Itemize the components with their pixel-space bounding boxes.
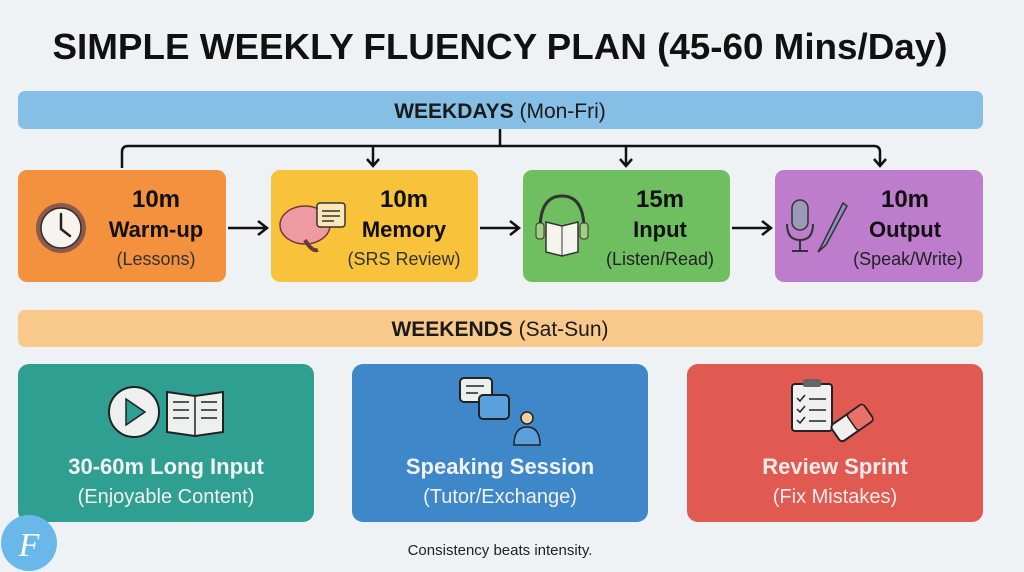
box: warm-up: [18, 170, 226, 282]
logo: [1, 515, 57, 571]
icon: brain: [280, 203, 345, 250]
box: memory: Memory: [362, 217, 447, 242]
panel: speaking session: Speaking Session: [406, 454, 594, 479]
box: input: [523, 170, 730, 282]
footer text: Consistency beats intensity.: [408, 542, 592, 559]
box: memory: 10m: [380, 186, 428, 213]
panel: speaking session: [352, 364, 648, 522]
icon: chat bubbles and person: [460, 378, 540, 445]
box: warm-up: Warm-up: [109, 217, 203, 242]
box: output: (Speak/Write): [853, 249, 963, 269]
panel: review sprint: [687, 364, 983, 522]
title: SIMPLE WEEKLY FLUENCY PLAN (45-60 Mins/Day): [52, 26, 947, 67]
icon: clock: [36, 203, 86, 253]
box: memory: (SRS Review): [347, 249, 461, 269]
box: warm-up: 10m: [132, 186, 180, 213]
box: output: Output: [869, 217, 942, 242]
icon: clipboard and eraser: [792, 379, 874, 443]
weekdays header bar: [18, 91, 983, 129]
panel: long input: [18, 364, 314, 522]
panel: review sprint: (Fix Mistakes): [773, 486, 897, 508]
logo: F: [18, 527, 41, 564]
arrow: [228, 221, 267, 235]
icon: mic and pen: [787, 200, 847, 252]
panel: speaking session: (Tutor/Exchange): [423, 486, 577, 508]
panel: long input: 30-60m Long Input: [68, 454, 264, 479]
connector arrows from weekdays bar: [122, 129, 886, 168]
arrow: [480, 221, 519, 235]
weekends header bar: [18, 310, 983, 347]
box: warm-up: (Lessons): [116, 249, 196, 269]
weekdays header bar: WEEKDAYS (Mon-Fri): [394, 100, 606, 123]
arrow: [732, 221, 771, 235]
panel: long input: (Enjoyable Content): [78, 486, 254, 508]
box: input: Input: [633, 217, 688, 242]
box: memory: [271, 170, 478, 282]
weekends header bar: WEEKENDS (Sat-Sun): [391, 318, 609, 341]
box: input: (Listen/Read): [606, 249, 714, 269]
box: input: 15m: [636, 186, 684, 213]
icon: headphones book: [536, 196, 588, 256]
box: output: 10m: [881, 186, 929, 213]
icon: play and book: [109, 387, 223, 437]
panel: review sprint: Review Sprint: [762, 454, 908, 479]
box: output: [775, 170, 983, 282]
